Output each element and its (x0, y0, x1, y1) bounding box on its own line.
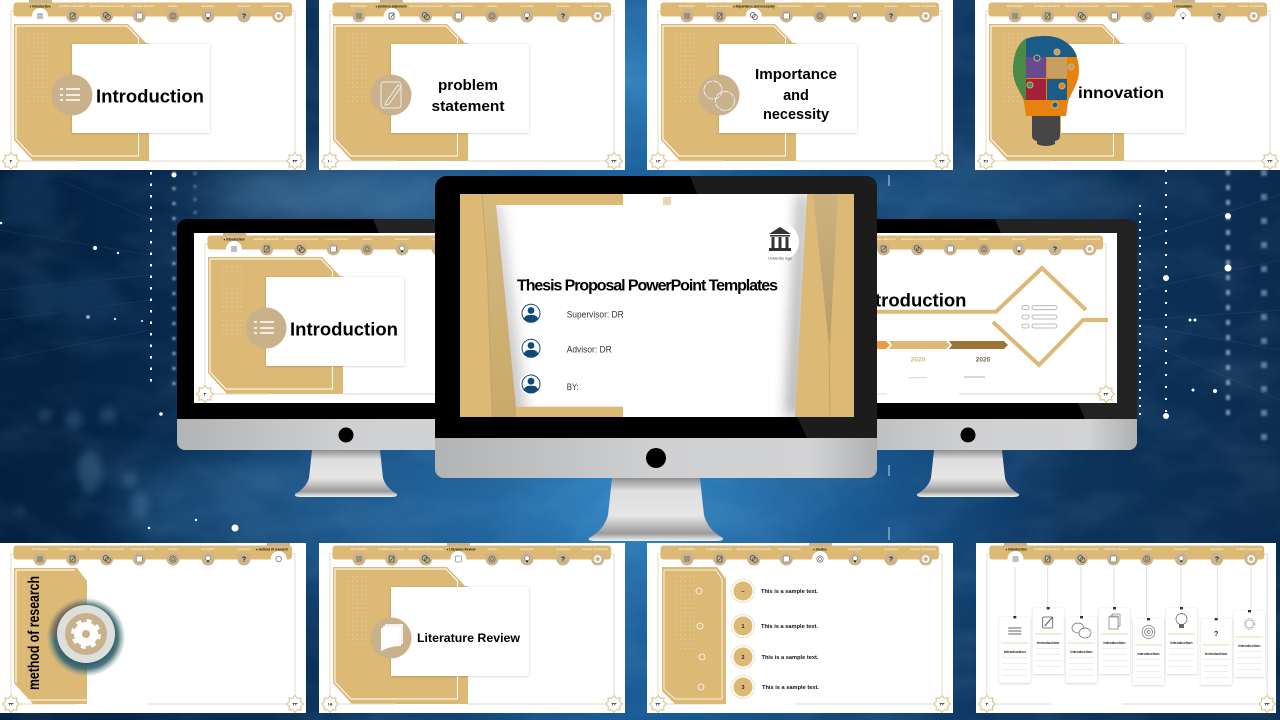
navigation labels: ۳۳ (293, 702, 298, 706)
navigation labels: questions (884, 547, 898, 551)
icon: speech bubbles (698, 74, 740, 116)
navigation labels: ? (1053, 246, 1057, 254)
navigation labels: problem statement (706, 547, 732, 551)
navigation labels: questions (431, 237, 445, 241)
navigation labels: ۳۳ (940, 702, 945, 706)
navigation labels: problem statement (59, 4, 85, 8)
right monitor (799, 219, 1137, 497)
navigation labels: questions (237, 547, 251, 551)
navigation labels: questions (1048, 237, 1062, 241)
by row (520, 373, 579, 395)
monitor body (435, 176, 877, 438)
navigation labels (986, 543, 1270, 706)
card 3: Introduction (1070, 650, 1093, 654)
icon: puzzle light bulb (1013, 36, 1079, 146)
university logo (761, 223, 799, 261)
navigation labels: problem statement (253, 237, 279, 241)
navigation labels: ۱۴ (656, 158, 661, 164)
navigation labels: method of research (1238, 4, 1264, 8)
heading: and (783, 88, 809, 104)
navigation labels: ۳۳ (1104, 392, 1109, 396)
monitor chin (799, 419, 1137, 450)
navigation labels: problem statement (706, 4, 732, 8)
navigation labels: innovation (201, 547, 215, 551)
navigation labels: method of research (910, 4, 936, 8)
card 1 (999, 616, 1030, 683)
navigation labels: ? (242, 14, 246, 20)
navigation labels: method of research (1074, 237, 1100, 241)
card 2 (1033, 607, 1064, 674)
navigation labels: Importance and necessity (1064, 547, 1099, 551)
navigation labels: questions (1212, 4, 1226, 8)
navigation labels: ? (1217, 14, 1221, 20)
card 4 (1099, 607, 1130, 674)
navigation labels: studies (1142, 547, 1152, 551)
left monitor (177, 219, 515, 497)
navigation labels: Introduction (351, 4, 367, 8)
navigation labels: Literature Review (130, 4, 154, 8)
card 7: Introduction (1205, 652, 1228, 656)
navigation labels: studies (1143, 4, 1153, 8)
card 5 (1133, 618, 1164, 685)
navigation labels: ? (561, 14, 565, 20)
heading: Importance (755, 67, 837, 83)
slide: Introduction (0, 0, 306, 170)
navigation labels: studies (815, 4, 825, 8)
navigation labels: ۲۲ (656, 702, 661, 706)
navigation labels: ۱۵ (328, 702, 333, 706)
icon: note and pencil (370, 74, 412, 116)
navigation labels: innovation (201, 4, 215, 8)
navigation labels: problem statement (378, 547, 404, 551)
list item: 2: This is a sample text. (762, 655, 819, 661)
navigation labels: Importance and necessity (284, 237, 319, 241)
navigation labels: ? (561, 556, 565, 564)
navigation labels: ? (889, 556, 893, 564)
right gold folds (795, 194, 854, 417)
navigation labels: ۳۳ (940, 158, 945, 164)
slide: method of research (0, 543, 306, 713)
navigation labels: questions (556, 4, 570, 8)
heading: Introduction (290, 320, 398, 340)
monitor stand (295, 450, 397, 497)
camera dot (960, 428, 976, 442)
navigation labels: Literature Review (449, 4, 473, 8)
left gold folds (460, 194, 623, 417)
card 6 (1166, 607, 1197, 674)
navigation labels: ♦ studies (813, 548, 827, 552)
list item: 3 (732, 676, 820, 698)
heading: Introduction (96, 86, 204, 106)
navigation labels (9, 543, 298, 706)
title card (391, 44, 529, 133)
heading: innovation (1078, 85, 1164, 102)
list item: 2 (732, 646, 819, 668)
navigation labels: ♦ method of research (256, 548, 288, 552)
navigation labels: ۳۳ (9, 702, 14, 706)
navigation labels: innovation (520, 4, 534, 8)
navigation labels: method of research (582, 4, 608, 8)
card 7 (1201, 618, 1232, 685)
navigation labels: ۲۶ (984, 158, 989, 164)
navigation labels: innovation (520, 547, 534, 551)
advisor row: Advisor: DR (567, 345, 612, 355)
card 5: Introduction (1137, 652, 1160, 656)
card 8 (1234, 610, 1265, 677)
title card (266, 277, 404, 366)
navigation labels: studies (487, 4, 497, 8)
card 7: ? (1214, 631, 1218, 638)
navigation labels: Literature Review (324, 237, 348, 241)
screen: Introduction slide (194, 233, 500, 403)
navigation labels: Introduction (679, 4, 695, 8)
navigation labels: Introduction (1007, 4, 1023, 8)
navigation labels: ۳۳ (1268, 158, 1273, 164)
list item: 2: 2 (741, 655, 745, 661)
navigation labels: studies (168, 4, 178, 8)
navigation labels: studies (487, 547, 497, 551)
navigation labels: Literature Review (1105, 4, 1129, 8)
screen: timeline slide (811, 233, 1117, 403)
supervisor row: Supervisor: DR (567, 309, 624, 319)
navigation labels: problem statement (1034, 547, 1060, 551)
navigation labels: Importance and necessity (901, 237, 936, 241)
navigation labels: Literature Review (777, 547, 801, 551)
year labels: 2025 (976, 357, 991, 364)
icon: list (52, 74, 92, 116)
navigation labels: studies (168, 547, 178, 551)
navigation labels: problem statement (1034, 4, 1060, 8)
heading: Introduction (858, 291, 966, 311)
heading (432, 78, 505, 115)
card 4: Introduction (1103, 641, 1126, 645)
navigation labels: Importance and necessity (90, 4, 125, 8)
navigation labels: ۳۳ (612, 702, 617, 706)
navigation labels: innovation (848, 4, 862, 8)
navigation labels: method of research (582, 547, 608, 551)
navigation labels: method of research (1236, 547, 1262, 551)
camera dot (338, 428, 354, 442)
navigation labels: method of research (910, 547, 936, 551)
slide: Importance and necessity (647, 0, 953, 170)
navigation labels: ♦ Introduction (29, 4, 51, 8)
monitor body (799, 219, 1137, 419)
gold side panel (662, 567, 726, 704)
list item: 1: 1 (741, 624, 745, 630)
icon: list (246, 308, 286, 348)
navigation labels: questions (237, 4, 251, 8)
card 1: Introduction (1004, 650, 1027, 654)
navigation labels: ۲ (10, 158, 13, 164)
navigation labels: ? (436, 246, 440, 254)
slide: innovation (975, 0, 1280, 170)
navigation labels: ۱۰ (328, 158, 332, 164)
slide: Literature Review (319, 543, 625, 713)
navigation labels: Literature Review (1104, 547, 1128, 551)
navigation labels: ♦ Introduction (1005, 548, 1027, 552)
navigation labels: Importance and necessity (409, 547, 444, 551)
card 8: Introduction (1238, 644, 1261, 648)
navigation labels: Introduction (351, 547, 367, 551)
list item: 3: 3 (741, 685, 745, 691)
icon: stacked pages (370, 618, 412, 658)
card 6: Introduction (1170, 641, 1193, 645)
heading: statement (432, 99, 505, 115)
slide: hanging cards (976, 543, 1276, 713)
navigation labels: Importance and necessity (1065, 4, 1100, 8)
navigation labels: Importance and necessity (90, 547, 125, 551)
navigation labels: Literature Review (130, 547, 154, 551)
navigation labels: innovation (848, 547, 862, 551)
title card (391, 587, 529, 676)
navigation labels: ۳۳ (487, 392, 492, 396)
navigation labels: ♦ Importance and necessity (733, 4, 775, 8)
diamond connector (811, 268, 1108, 365)
navigation labels: method of research (457, 237, 483, 241)
card 2: Introduction (1037, 641, 1060, 645)
navigation labels: ۳۳ (293, 158, 298, 164)
title: Thesis Proposal PowerPoint Templates (517, 278, 778, 295)
monitor chin (435, 438, 877, 478)
navigation labels: innovation (1012, 237, 1026, 241)
navigation labels (656, 543, 945, 706)
navigation labels: questions (884, 4, 898, 8)
navigation labels: ۳۳ (1265, 702, 1270, 706)
list item: 1 (732, 614, 819, 638)
title card (1061, 44, 1185, 133)
navigation labels: ? (889, 14, 893, 20)
navigation labels: questions (1210, 547, 1224, 551)
by row: BY: (567, 382, 579, 392)
navigation labels: problem statement (59, 547, 85, 551)
navigation labels: Importance and necessity (409, 4, 444, 8)
list item: dash: – (741, 589, 745, 595)
navigation labels: ? (1215, 556, 1219, 564)
icon: small list mark (663, 197, 671, 205)
slide: problem statement (319, 0, 625, 170)
heading (755, 67, 837, 123)
heading: Literature Review (417, 631, 521, 645)
gold side panel (14, 568, 87, 704)
navigation labels: studies (979, 237, 989, 241)
card 3 (1066, 616, 1097, 683)
navigation labels: ۲ (204, 392, 207, 396)
center monitor (435, 176, 877, 541)
navigation labels: ♦ Literature Review (446, 548, 476, 552)
icon: list rows (1022, 306, 1057, 328)
navigation labels: problem statement (870, 237, 896, 241)
navigation labels: Introduction (679, 547, 695, 551)
navigation labels (328, 0, 617, 164)
navigation labels: studies (362, 237, 372, 241)
screen: title slide (460, 194, 854, 417)
advisor row (520, 337, 612, 359)
monitor chin (177, 419, 515, 450)
navigation labels (870, 237, 1109, 396)
monitor body (177, 219, 515, 419)
title card (72, 44, 210, 133)
vertical heading: method of research (26, 576, 43, 690)
navigation labels (328, 543, 617, 706)
navigation labels: method of research (263, 4, 289, 8)
title card (719, 44, 857, 133)
list item: dash: This is a sample text. (761, 589, 819, 595)
supervisor row (520, 302, 624, 324)
list item: dash (732, 580, 819, 602)
heading: necessity (763, 107, 829, 123)
university logo: University logo (768, 256, 792, 260)
navigation labels: questions (556, 547, 570, 551)
list item: 1: This is a sample text. (761, 624, 819, 630)
navigation labels (656, 0, 945, 164)
navigation labels (204, 233, 492, 396)
navigation labels: Importance and necessity (737, 547, 772, 551)
navigation labels: ♦ Introduction (223, 238, 245, 242)
navigation labels: ۲ (986, 702, 989, 706)
icon: gear rings (47, 598, 125, 676)
monitor stand (917, 450, 1019, 497)
slide: studies list (647, 543, 953, 713)
navigation labels: ♦ innovation (1174, 4, 1192, 8)
navigation labels (10, 0, 298, 164)
navigation labels (984, 0, 1273, 164)
navigation labels: innovation (1174, 547, 1188, 551)
navigation labels: ♦ problem statement (375, 4, 407, 8)
navigation labels: Literature Review (777, 4, 801, 8)
monitor stand (589, 478, 723, 541)
year labels (911, 357, 991, 364)
heading: problem (438, 78, 498, 94)
timeline arrows (851, 341, 1008, 349)
hanger lines (1015, 567, 1251, 619)
navigation labels: ۳۳ (612, 158, 617, 164)
camera dot (646, 448, 666, 468)
year labels: 2020 (911, 357, 926, 364)
list item: 3: This is a sample text. (762, 685, 820, 691)
navigation labels: Literature Review (941, 237, 965, 241)
navigation labels: ? (242, 556, 246, 564)
navigation labels: Introduction (32, 547, 48, 551)
navigation labels: innovation (395, 237, 409, 241)
